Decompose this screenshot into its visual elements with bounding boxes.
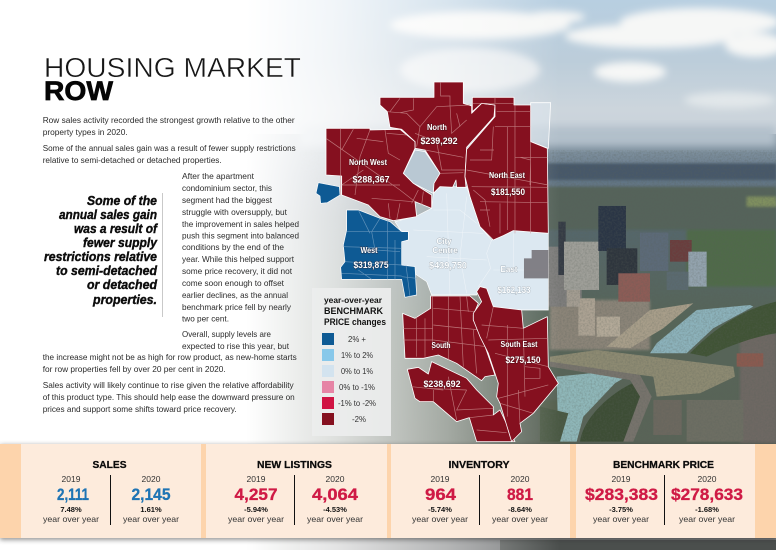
- legend swatches: -2%: [352, 415, 366, 424]
- closing text: [43, 352, 297, 414]
- panel: inventory: 881: [507, 485, 533, 504]
- legend swatches: -1% to -2%: [338, 399, 376, 408]
- label: North West: [349, 158, 390, 186]
- panel: new listings: 4,257: [234, 485, 278, 504]
- panel: sales: year over year: [43, 514, 99, 524]
- legend title: [324, 295, 386, 327]
- panel: new listings: -5.94%: [244, 505, 268, 514]
- panel: sales: 1.61%: [140, 505, 162, 514]
- label: North West: North West: [349, 158, 387, 167]
- panel: new listings: [206, 444, 387, 538]
- panel: benchmark price: $283,383: [585, 485, 658, 504]
- region: north west blue outlier: [316, 183, 340, 203]
- panel: inventory: 964: [425, 485, 457, 504]
- legend swatches: 0% to -1%: [339, 383, 375, 392]
- pull quote: fewer supply: [83, 235, 158, 250]
- label: East: $162,133: [498, 285, 530, 296]
- column text: some price recovery, it did not: [182, 266, 293, 276]
- label: North: $239,292: [420, 136, 458, 147]
- panel: inventory: 2019: [431, 474, 450, 484]
- panel: inventory: -8.64%: [508, 505, 532, 514]
- label: City Centre: [429, 237, 467, 272]
- title: [44, 52, 301, 106]
- panel: inventory: [391, 444, 570, 538]
- label: North: North: [427, 123, 447, 132]
- intro text: Some of the annual sales gain was a result of fewer supply restrictions: [43, 143, 296, 153]
- region: City Centre and East: [395, 187, 548, 310]
- legend title: year-over-year: [324, 295, 383, 305]
- column text: the improvement in sales helped: [182, 219, 299, 229]
- column text: After the apartment: [182, 171, 255, 181]
- pull quote: [44, 193, 159, 307]
- pull quote: Some of the: [87, 193, 157, 208]
- panel: new listings: 4,064: [312, 485, 359, 504]
- column text: conditions by the end of the: [182, 242, 284, 252]
- legend swatches: [322, 333, 376, 425]
- label: North East: $181,550: [491, 187, 525, 198]
- pull quote: restrictions relative: [44, 249, 157, 264]
- pull quote: to semi-detached: [56, 263, 158, 278]
- label: West: [354, 246, 389, 271]
- panel: benchmark price: 2020: [698, 474, 717, 484]
- label: City Centre: Centre: [432, 246, 458, 255]
- closing text: Sales activity will likely continue to rise given the relative affordability: [43, 380, 294, 390]
- region: Nose Hill park: [403, 150, 440, 193]
- pull quote: or detached: [87, 277, 158, 292]
- title: ROW: [44, 76, 114, 106]
- label: South: $238,692: [424, 379, 460, 390]
- label: North West: $288,367: [352, 174, 390, 186]
- column text: [182, 171, 299, 351]
- legend title: PRICE changes: [324, 317, 386, 327]
- intro text: Row sales activity recorded the strongest growth relative to the other: [43, 115, 295, 125]
- legend swatches: 1% to 2%: [341, 351, 373, 360]
- stats band: [0, 444, 776, 540]
- label: East: East: [501, 265, 518, 274]
- panel: new listings: year over year: [228, 514, 284, 524]
- region: upper north east pale: [531, 103, 551, 148]
- pull quote: annual sales gain: [59, 207, 157, 222]
- label: West: $319,875: [354, 260, 389, 271]
- column text: Overall, supply levels are: [182, 329, 271, 339]
- label: North East: [489, 171, 525, 198]
- column text: struggle with oversupply, but: [182, 207, 288, 217]
- panel: benchmark price: year over year: [679, 514, 735, 524]
- panel: sales: year over year: [123, 514, 179, 524]
- legend title: BENCHMARK: [324, 306, 383, 317]
- panel: sales: 2020: [142, 474, 161, 484]
- column text: two per cent.: [182, 314, 229, 324]
- panel: benchmark price: -1.68%: [695, 505, 719, 514]
- label: South East: South East: [500, 340, 538, 349]
- panel: inventory: 2020: [511, 474, 530, 484]
- region: South lower: [407, 362, 515, 442]
- panel: benchmark price: 2019: [612, 474, 631, 484]
- legend: [312, 288, 391, 436]
- title: HOUSING MARKET: [44, 52, 301, 83]
- panel: sales: 7.48%: [60, 505, 82, 514]
- region: West: [341, 210, 417, 297]
- panel: benchmark price: -3.75%: [609, 505, 633, 514]
- column text: condominium sector, this: [182, 183, 272, 193]
- panel: new listings: -4.53%: [323, 505, 347, 514]
- column text: come soon enough to offset: [182, 278, 285, 288]
- intro text: [43, 115, 296, 165]
- label: City Centre: City: [436, 237, 452, 246]
- intro text: property types in 2020.: [43, 127, 128, 137]
- region: North: [380, 82, 495, 193]
- panel: sales: 2019: [62, 474, 81, 484]
- label: North East: North East: [489, 171, 525, 180]
- label: City Centre: $439,750: [429, 260, 467, 272]
- column text: expected to rise this year, but: [182, 341, 290, 351]
- panel: new listings: 2019: [247, 474, 266, 484]
- pull quote: properties.: [92, 292, 157, 307]
- closing text: the increase might not be as high for row product, as new-home starts: [43, 352, 297, 362]
- panel: inventory: year over year: [492, 514, 548, 524]
- legend swatches: 2% +: [348, 335, 366, 344]
- label: South: South: [432, 341, 451, 350]
- label: South East: $275,150: [506, 355, 540, 366]
- pull quote: was a result of: [74, 221, 159, 236]
- column text: push this segment into balanced: [182, 230, 299, 240]
- region: South East: [473, 287, 558, 442]
- panel: sales: 2,111: [57, 485, 89, 504]
- panel: inventory: INVENTORY: [448, 460, 510, 471]
- region: South: [403, 296, 495, 381]
- label: West: West: [360, 246, 378, 255]
- panel: benchmark price: BENCHMARK PRICE: [613, 460, 714, 471]
- closing text: prices and support some shifts toward price recovery.: [43, 404, 237, 414]
- panel: inventory: year over year: [412, 514, 468, 524]
- panel: new listings: year over year: [307, 514, 363, 524]
- column text: earlier declines, as the annual: [182, 290, 288, 300]
- panel: sales: 2,145: [132, 485, 170, 504]
- region: North West: [326, 128, 432, 221]
- map of city quadrants: [316, 82, 558, 442]
- panel: new listings: 2020: [326, 474, 345, 484]
- label: South: [424, 341, 460, 390]
- column text: segment had the biggest: [182, 195, 273, 205]
- panel: benchmark price: [576, 444, 755, 538]
- column text: year. While this helped support: [182, 254, 295, 264]
- legend swatches: 0% to 1%: [341, 367, 373, 376]
- closing text: of this product type. This should help ease the downward pressure on: [43, 392, 295, 402]
- closing text: for row properties fell by over 20 per cent in 2020.: [43, 364, 226, 374]
- panel: benchmark price: $278,633: [671, 485, 743, 504]
- panel: sales: SALES: [92, 460, 127, 471]
- label: East: [498, 265, 530, 296]
- panel: new listings: NEW LISTINGS: [257, 460, 332, 471]
- panel: inventory: -5.74%: [428, 505, 452, 514]
- intro text: relative to semi-detached or detached properties.: [43, 155, 222, 165]
- column text: benchmark price fell by nearly: [182, 302, 292, 312]
- panel: benchmark price: year over year: [593, 514, 649, 524]
- panel: sales: [21, 444, 201, 538]
- label: North: [420, 123, 458, 147]
- region: North East: [465, 97, 548, 240]
- label: South East: [500, 340, 540, 366]
